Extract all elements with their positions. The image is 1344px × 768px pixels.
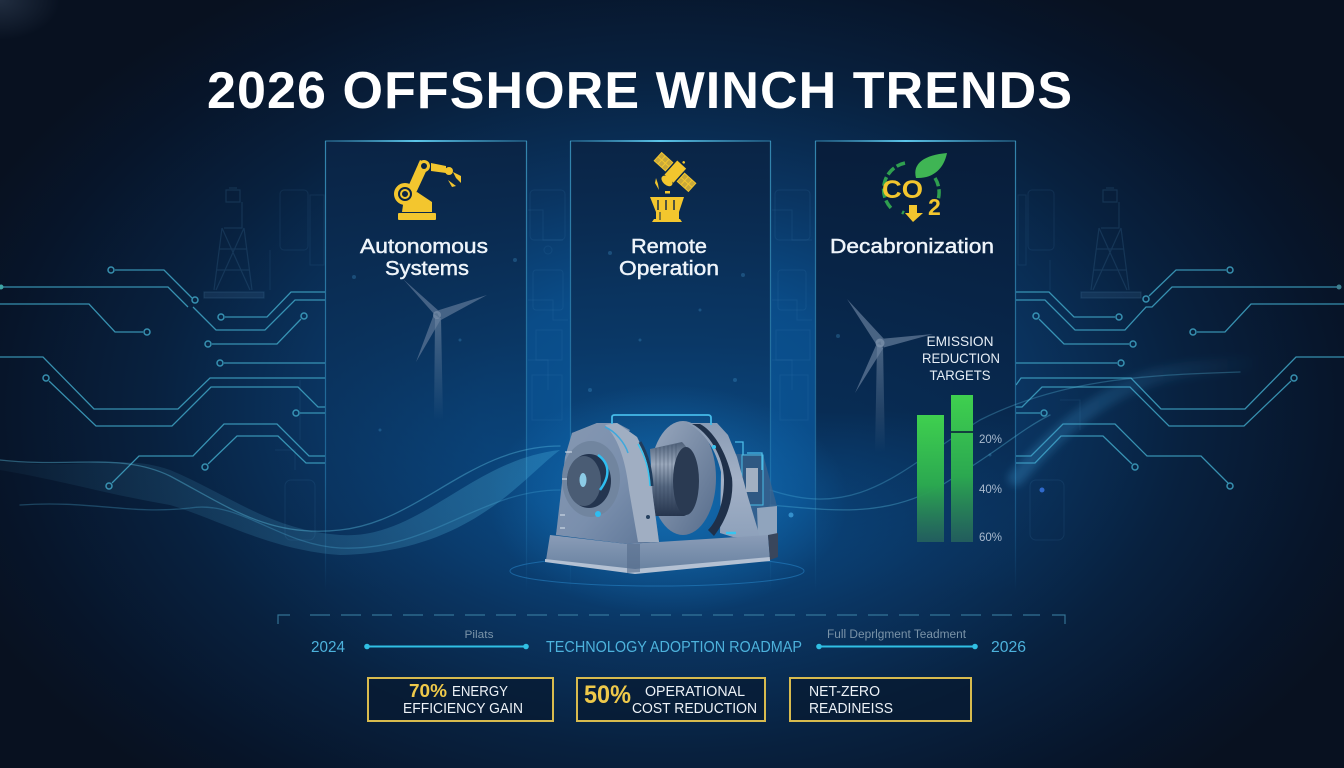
timeline segment: pilots	[364, 629, 529, 649]
winch flange	[650, 421, 716, 535]
timeline segment: full deployment	[816, 629, 978, 649]
icon: satellite and control tower	[647, 146, 702, 222]
sparkle dots	[352, 251, 1044, 518]
bar chart: emission reduction targets: 60%	[979, 532, 1002, 544]
timeline segment: pilots: Pilats	[464, 629, 494, 641]
left oil derrick	[204, 188, 264, 298]
wind turbine: left panel	[403, 279, 487, 420]
bar chart: emission reduction targets	[917, 395, 1002, 544]
callout: operational cost: COST REDUCTION	[632, 700, 757, 717]
callout: operational cost: 50%	[584, 681, 631, 709]
heading: autonomous systems: Systems	[385, 258, 469, 280]
timeline segment: full deployment: Full Deprlgment Teadment	[827, 629, 967, 641]
winch side box	[735, 442, 777, 536]
chart heading: TARGETS	[930, 367, 990, 383]
callout: net-zero readiness: READINEISS	[809, 700, 893, 717]
winch top rail	[612, 415, 711, 425]
wind turbine: right panel	[847, 299, 933, 452]
heading: autonomous systems: Autonomous	[360, 236, 488, 258]
chart heading: REDUCTION	[922, 350, 1000, 366]
roadmap dashed bracket	[278, 615, 1065, 624]
icon: robotic arm	[396, 160, 461, 220]
callout: energy efficiency	[368, 678, 553, 721]
roadmap	[311, 629, 1026, 656]
winch drum	[650, 442, 699, 516]
faint circuit board texture	[270, 190, 1080, 540]
callout: operational cost: OPERATIONAL	[645, 683, 745, 700]
icon: CO2 reduction with leaf: CO	[882, 176, 923, 204]
right circuit lines	[1016, 267, 1344, 489]
chart heading	[922, 333, 1000, 383]
panel: autonomous systems	[325, 140, 527, 591]
winch left housing	[556, 423, 659, 544]
callout: energy efficiency: EFFICIENCY GAIN	[403, 700, 523, 717]
heading: decarbonization: Decabronization	[830, 236, 994, 258]
bar chart: emission reduction targets: 40%	[979, 484, 1002, 496]
heading: remote operation	[619, 236, 719, 280]
roadmap label: TECHNOLOGY ADOPTION ROADMAP	[546, 639, 802, 656]
icon: CO2 reduction with leaf: 2	[928, 194, 941, 220]
flowing wave ribbons	[0, 362, 1260, 555]
bar chart: emission reduction targets: 20%	[979, 434, 1002, 446]
year 2026: 2026	[991, 639, 1026, 656]
year 2024: 2024	[311, 639, 345, 656]
left circuit lines	[0, 267, 325, 489]
winch right housing	[687, 423, 760, 537]
chart heading: EMISSION	[926, 333, 994, 349]
winch machine	[488, 385, 848, 615]
heading: remote operation: Remote	[631, 236, 707, 258]
heading: autonomous systems	[360, 236, 488, 280]
callout: net-zero readiness: NET-ZERO	[809, 683, 880, 700]
winch base	[545, 533, 778, 574]
callout: net-zero readiness	[790, 678, 971, 721]
heading: remote operation: Operation	[619, 258, 719, 280]
callout: operational cost	[577, 678, 765, 721]
right oil derrick	[1081, 188, 1141, 298]
icon: CO2 reduction with leaf	[882, 153, 947, 222]
panel: decarbonization	[815, 140, 1016, 591]
panel: remote operation	[570, 140, 771, 591]
title: 2026 OFFSHORE WINCH TRENDS	[207, 62, 1072, 120]
callout: energy efficiency: ENERGY	[452, 683, 508, 700]
callout: energy efficiency: 70%	[409, 681, 447, 701]
